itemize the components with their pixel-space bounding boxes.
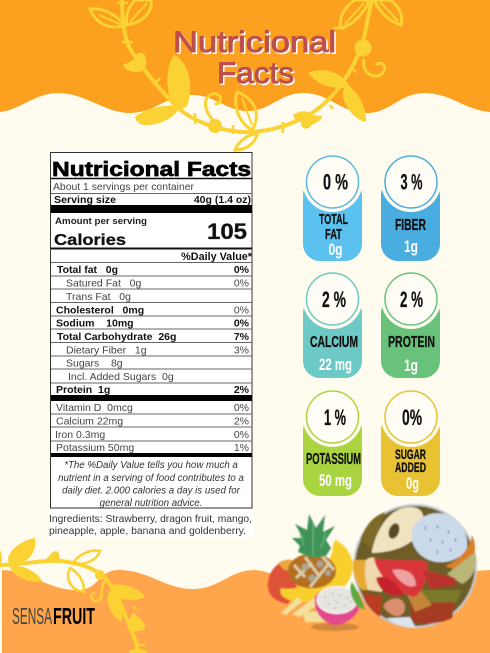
calories: Calories: [54, 232, 126, 249]
calories: [54, 216, 247, 249]
pale apple: [447, 552, 476, 584]
footnote: daily diet. 2.000 calories a day is used for: [62, 486, 241, 496]
nutrient rows: 2%: [234, 416, 249, 428]
footnote: [58, 460, 245, 509]
upper-left outline leaves: [90, 0, 151, 27]
nutrient rows: Potassium 50mg: [56, 442, 134, 454]
nutrient rows: 0%: [234, 402, 249, 414]
shadow: [311, 623, 359, 631]
outline leaves: [73, 550, 100, 564]
big leaves left: [167, 55, 190, 109]
badge: fiber: 3 %: [400, 170, 422, 194]
nutrient rows: 7%: [234, 331, 250, 343]
footnote: nutrient in a serving of food contributes to a: [58, 473, 245, 484]
badge: fiber: 1g: [404, 237, 418, 256]
bottom centre outline leaves: [235, 92, 257, 150]
ingredients: [49, 509, 254, 538]
nutrient rows: 0%: [234, 304, 249, 316]
serving info: 40g (1.4 oz): [194, 194, 251, 206]
badge: calcium: 2 %: [322, 287, 346, 312]
badge: sugar added: 0%: [402, 405, 422, 430]
vine stem: [0, 561, 138, 653]
mango: [268, 560, 297, 604]
badge: potassium: [302, 387, 362, 496]
top orange wave band: [0, 0, 490, 113]
ingredients background: [49, 509, 254, 538]
nutrition facts panel: [50, 152, 253, 509]
nutrient rows: Sugars 8g: [66, 358, 123, 370]
badge: sugar added: SUGAR: [395, 446, 426, 462]
badge: protein: [381, 269, 441, 378]
calories: 105: [207, 219, 247, 244]
daily value header: %Daily Value*: [181, 251, 253, 263]
round buds: [208, 119, 222, 133]
badge: protein: PROTEIN: [388, 334, 435, 351]
curl: [91, 582, 104, 601]
orange slice edge: [445, 535, 475, 574]
thick black bars: [51, 205, 252, 457]
title shadow: [174, 28, 338, 92]
curl tendrils: [206, 94, 221, 122]
pineapple body: [288, 554, 336, 588]
vine stem: [122, 0, 372, 132]
title text: Facts: [217, 57, 294, 90]
badge: potassium: 1 %: [324, 405, 346, 430]
dried pieces lower: [362, 593, 382, 617]
banana: [280, 540, 353, 602]
panel heading: Nutricional Facts: [52, 158, 251, 181]
nutrient rows: Sodium 10mg: [56, 318, 134, 330]
nutrient rows: [55, 264, 250, 454]
nutrient rows: Total Carbohydrate 26g: [57, 331, 176, 343]
pineapple crown: [292, 514, 335, 558]
footnote: *The %Daily Value tells you how much a: [64, 460, 238, 471]
brand logo: SENSA: [12, 603, 52, 629]
left dried mango: [353, 560, 378, 590]
badge: calcium: [302, 269, 362, 378]
leaves: [8, 538, 35, 565]
stem thorns: [117, 3, 356, 134]
nutrient rows: 0%: [234, 278, 249, 290]
badge: fiber: [381, 152, 441, 261]
left pale apple: [365, 557, 385, 592]
badge: total fat: [302, 152, 362, 261]
dark gaps: [360, 512, 385, 548]
top vine decoration: [90, 0, 402, 150]
title text: [173, 26, 336, 90]
ingredients text: Ingredients: Strawberry, dragon fruit, mango,: [49, 514, 252, 525]
ingredients: pineapple, apple, banana and goldenberry.: [49, 526, 246, 537]
strawberry large: [374, 558, 428, 597]
badge: protein: 1g: [404, 356, 418, 375]
bowl circle: [354, 505, 476, 627]
nutrient rows: Iron 0.3mg: [55, 429, 105, 441]
serving info: [53, 181, 251, 206]
badge: potassium: POTASSIUM: [306, 451, 361, 468]
apple ring: [372, 507, 424, 553]
footnote: general nutrition advice.: [100, 498, 202, 509]
title: [173, 26, 338, 92]
upper-right outline leaves: [340, 0, 402, 28]
nutrient rows: 1%: [234, 442, 249, 454]
fresh fruit illustration: [268, 514, 365, 631]
badge: sugar added: 0g: [406, 474, 419, 493]
nutrient rows: 0%: [234, 318, 250, 330]
badge: total fat: 0g: [328, 240, 342, 259]
bottom vine decoration: [0, 538, 147, 653]
nutrient rows: Protein 1g: [56, 384, 110, 396]
buds: [46, 551, 60, 562]
title text: Nutricional: [173, 26, 336, 59]
title shadow: Facts: [218, 58, 296, 92]
nutrient rows: Dietary Fiber 1g: [66, 344, 147, 356]
nutrient rows: 0%: [234, 264, 250, 276]
badge: calcium: CALCIUM: [310, 334, 358, 351]
badge: total fat: FAT: [325, 226, 342, 243]
dried fruit bowl photo: [353, 505, 476, 628]
nutrient rows: Vitamin D 0mcg: [56, 402, 133, 414]
nutrient rows: 3%: [234, 344, 249, 356]
badge: protein: 2 %: [400, 287, 423, 312]
badge: sugar added: [381, 387, 441, 496]
nutrient rows: 2%: [234, 384, 250, 396]
badge: potassium: 50 mg: [319, 471, 352, 490]
bottom orange wave band: [2, 570, 490, 653]
badge: total fat: TOTAL: [319, 211, 348, 228]
serving info: Serving size: [54, 194, 116, 206]
nutrient rows: 0%: [234, 429, 249, 441]
badge: total fat: 0 %: [323, 170, 348, 194]
divider lines: [51, 178, 252, 441]
nutrient rows: Total fat 0g: [57, 264, 118, 276]
dragon fruit slice: [411, 513, 467, 562]
panel box: [50, 152, 252, 508]
calories: Amount per serving: [55, 216, 147, 226]
nutrient rows: Calcium 22mg: [56, 416, 123, 428]
heart buds: [123, 53, 146, 72]
nutrient rows: Trans Fat 0g: [66, 291, 131, 303]
title shadow: Nutricional: [174, 28, 338, 60]
dragon fruit: [315, 588, 360, 625]
banana slices: [281, 597, 325, 622]
badge: calcium: 22 mg: [319, 355, 352, 374]
nutrient rows: Incl. Added Sugars 0g: [68, 371, 174, 383]
nutrient rows: Cholesterol 0mg: [56, 304, 144, 316]
strawberry right: [423, 570, 456, 589]
big leaves right: [308, 70, 350, 88]
badge: fiber: FIBER: [395, 217, 426, 234]
small strawberry: [376, 577, 404, 596]
serving info: About 1 servings per container: [53, 181, 194, 193]
badge: sugar added: ADDED: [395, 459, 426, 475]
nutrient rows: Satured Fat 0g: [66, 278, 141, 290]
brand logo: FRUIT: [53, 603, 95, 629]
